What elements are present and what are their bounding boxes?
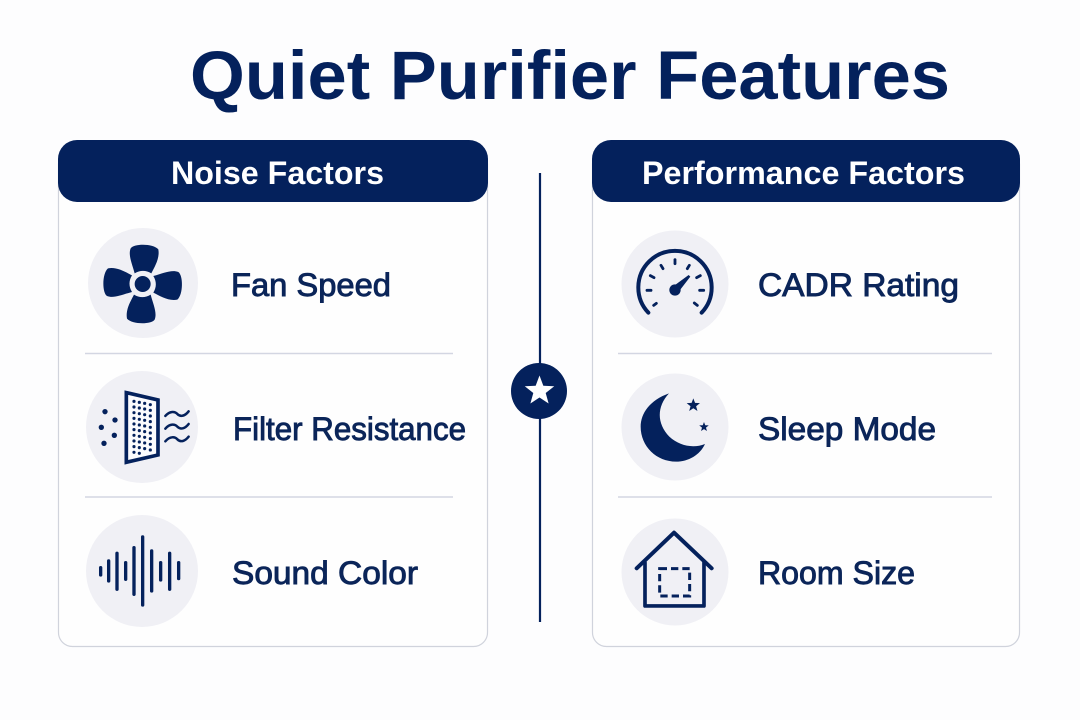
- panel heading: Noise Factors: [171, 155, 384, 191]
- label: filter resistance: Filter Resistance: [233, 411, 466, 447]
- center divider with star badge: [511, 173, 567, 622]
- panel: performance factors: [592, 140, 1020, 646]
- icon: moon and stars: [622, 374, 728, 480]
- label: fan speed: Fan Speed: [231, 267, 391, 303]
- icon: sound wave: [86, 515, 198, 627]
- label: sleep mode: Sleep Mode: [758, 411, 936, 447]
- icon: gauge: [622, 230, 728, 338]
- icon: filter: [86, 371, 198, 483]
- icon: fan: [88, 228, 198, 338]
- label: cadr rating: CADR Rating: [758, 267, 959, 303]
- panel: noise factors: [58, 140, 488, 646]
- panel heading: Performance Factors: [642, 155, 965, 191]
- label: room size: Room Size: [758, 555, 915, 591]
- icon: house: [622, 518, 728, 626]
- title: Quiet Purifier Features: [190, 37, 950, 114]
- panel heading: [592, 140, 1020, 202]
- panel body: [58, 150, 488, 646]
- label: sound color: Sound Color: [232, 555, 418, 591]
- panel body: [592, 150, 1020, 646]
- panel heading: [58, 140, 488, 202]
